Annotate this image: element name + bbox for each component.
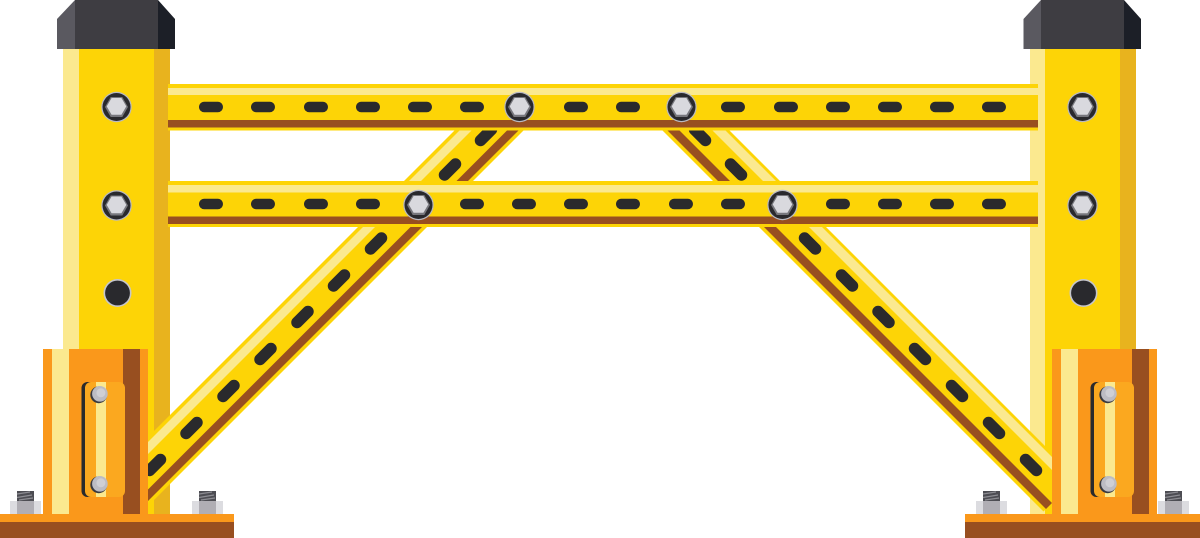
top rail <box>168 84 1038 130</box>
left anchor nuts <box>10 491 223 514</box>
left diagonal brace <box>148 130 524 501</box>
right post <box>1030 49 1136 514</box>
right post cap <box>1024 0 1141 49</box>
right base plate <box>965 514 1200 538</box>
right anchor nuts <box>976 491 1189 514</box>
left post bolts and hole <box>101 92 132 307</box>
left post cap <box>57 0 175 49</box>
right post bolts and hole <box>1067 92 1098 307</box>
left post <box>63 49 170 514</box>
middle rail <box>168 181 1038 227</box>
rail junction bolts <box>403 92 798 220</box>
right bracket <box>1052 349 1157 515</box>
left bracket <box>43 349 148 515</box>
left base plate <box>0 514 234 538</box>
right diagonal brace <box>662 130 1052 512</box>
